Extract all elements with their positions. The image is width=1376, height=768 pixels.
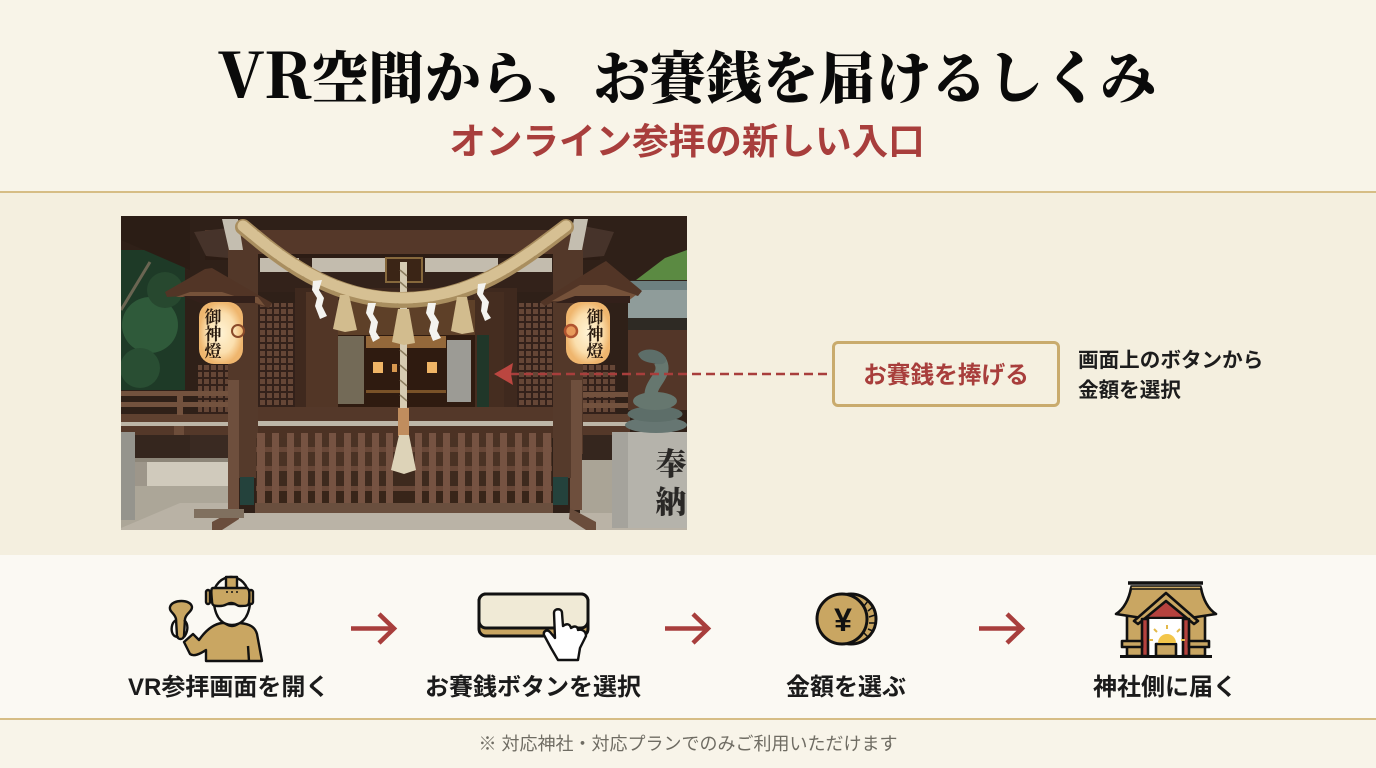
callout note: 金額を選択 [1078, 379, 1181, 402]
back wall [121, 216, 687, 530]
callout button [832, 341, 1060, 407]
right lantern: 御 [586, 303, 604, 328]
right lantern: 燈 [586, 337, 604, 362]
photo: shrine front [121, 216, 687, 530]
arrow 2 [665, 612, 712, 645]
right annex roof [628, 281, 687, 410]
left lantern: 御 [204, 303, 222, 328]
main photo band [0, 191, 1376, 555]
small roof right [540, 261, 642, 306]
tassels [333, 295, 474, 345]
icon: yen coin: ¥ [834, 602, 852, 638]
right post [553, 232, 596, 530]
icon: VR user [168, 576, 264, 662]
stone pedestal [612, 432, 687, 528]
callout note [1078, 349, 1263, 402]
stone pedestal: 納 [656, 477, 686, 522]
left lantern: 燈 [204, 337, 222, 362]
footer band [0, 718, 1376, 768]
footnote: ※ 対応神社・対応プランでのみご利用いただけます [478, 734, 898, 754]
header band [0, 0, 1376, 191]
steps band [0, 555, 1376, 718]
callout button: お賽銭を捧げる [863, 363, 1029, 389]
callout note: 画面上のボタンから [1078, 349, 1263, 372]
beam end carvings [194, 228, 228, 258]
label: step 2: お賽銭ボタンを選択 [425, 674, 641, 701]
fence [255, 433, 553, 513]
white wall panels [260, 258, 385, 272]
right railing [580, 392, 630, 515]
ground [232, 513, 687, 530]
veranda floor [258, 407, 554, 421]
label: step 1: VR参拝画面を開く [128, 674, 329, 701]
subtitle: オンライン参拝の新しい入口 [449, 121, 925, 162]
icon: button with hand [478, 592, 590, 662]
left lantern [199, 302, 244, 364]
label: step 3: 金額を選ぶ [786, 674, 906, 701]
left lantern: 神 [204, 320, 222, 345]
side lattice [260, 303, 293, 405]
right lantern: 神 [586, 320, 604, 345]
central plaque [386, 258, 422, 282]
arrow 1 [351, 612, 398, 645]
stone pedestal: 奉 [656, 439, 686, 484]
shimenawa rope [243, 226, 566, 300]
trees [120, 250, 185, 390]
left railing [121, 391, 228, 435]
arrow 3 [979, 612, 1026, 645]
snake statue [625, 349, 687, 433]
main beam [205, 230, 553, 254]
shide paper [312, 280, 491, 342]
title: VR空間から、お賽銭を届けるしくみ [218, 27, 1156, 116]
label: step 4: 神社側に届く [1093, 674, 1237, 701]
lower left wall [174, 435, 184, 458]
icon: shrine [1114, 581, 1218, 658]
doors and interior [295, 288, 517, 420]
icon: yen coin [816, 592, 878, 646]
hanging bell rope [391, 262, 416, 474]
left post [194, 232, 258, 530]
small roof left [165, 268, 272, 308]
right lantern [565, 302, 610, 364]
